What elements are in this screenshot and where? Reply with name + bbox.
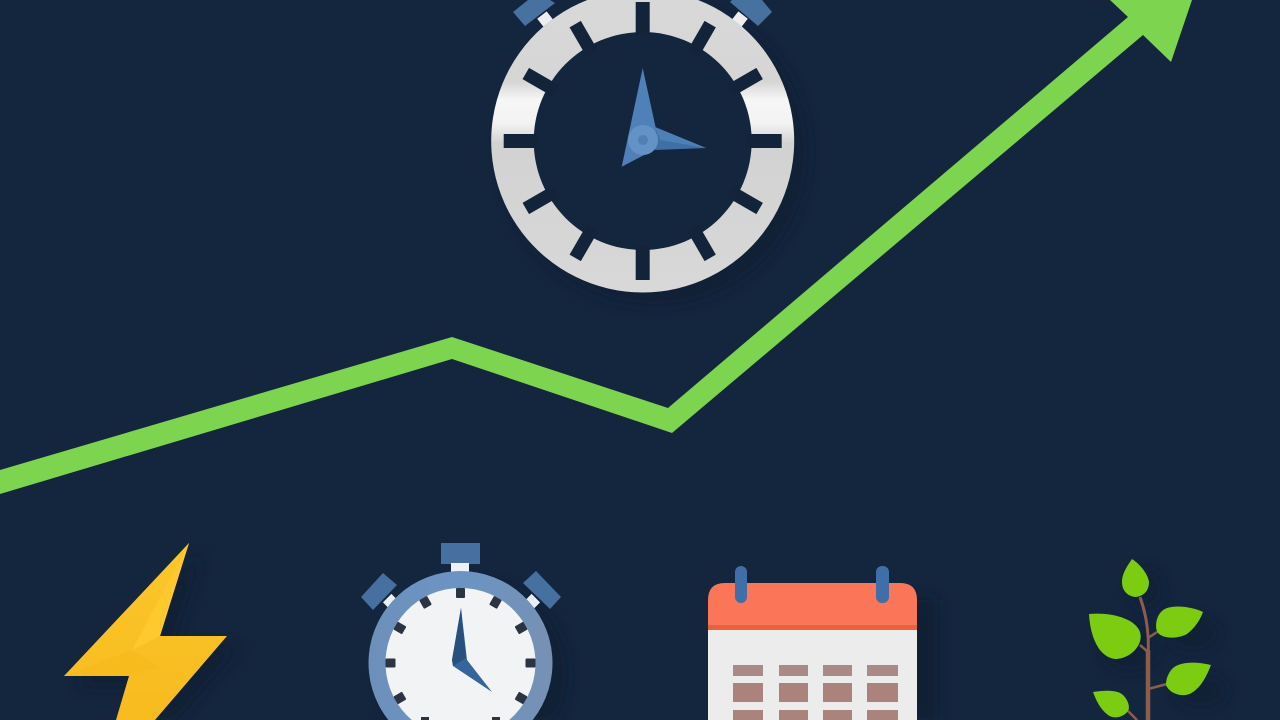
outer ring: [369, 571, 553, 720]
white face: [386, 588, 536, 720]
top button: [441, 543, 480, 564]
left button: [361, 573, 397, 610]
stopwatch icon: [361, 543, 566, 720]
growth arrow: [0, 0, 1192, 494]
metal ring: [491, 0, 794, 293]
lower right leaf: [1166, 663, 1211, 695]
clock face: [534, 32, 752, 250]
bell connectors: [537, 11, 748, 27]
side connectors: [383, 594, 540, 608]
calendar body: [708, 625, 917, 720]
top leaf: [1122, 559, 1149, 597]
upper right leaf: [1156, 607, 1203, 638]
stopwatch hands: [452, 608, 492, 692]
leaf shadows: [1104, 571, 1226, 706]
header edge: [708, 625, 917, 630]
stem: [1128, 597, 1167, 720]
right bell button: [730, 0, 772, 26]
large clock: [491, 0, 807, 304]
plant icon: [1089, 559, 1226, 720]
left bell button: [513, 0, 555, 26]
lower left leaf: [1093, 691, 1129, 717]
binder rings: [735, 566, 889, 603]
top connector: [451, 563, 469, 572]
hour ticks: [504, 2, 782, 280]
clock hands: [622, 68, 706, 167]
right button: [523, 571, 561, 609]
lightning bolt icon: [64, 543, 239, 720]
date grid: [733, 665, 898, 720]
tick marks: [386, 588, 536, 720]
big left leaf: [1089, 614, 1141, 659]
red header: [708, 583, 917, 629]
calendar icon: [708, 566, 937, 720]
